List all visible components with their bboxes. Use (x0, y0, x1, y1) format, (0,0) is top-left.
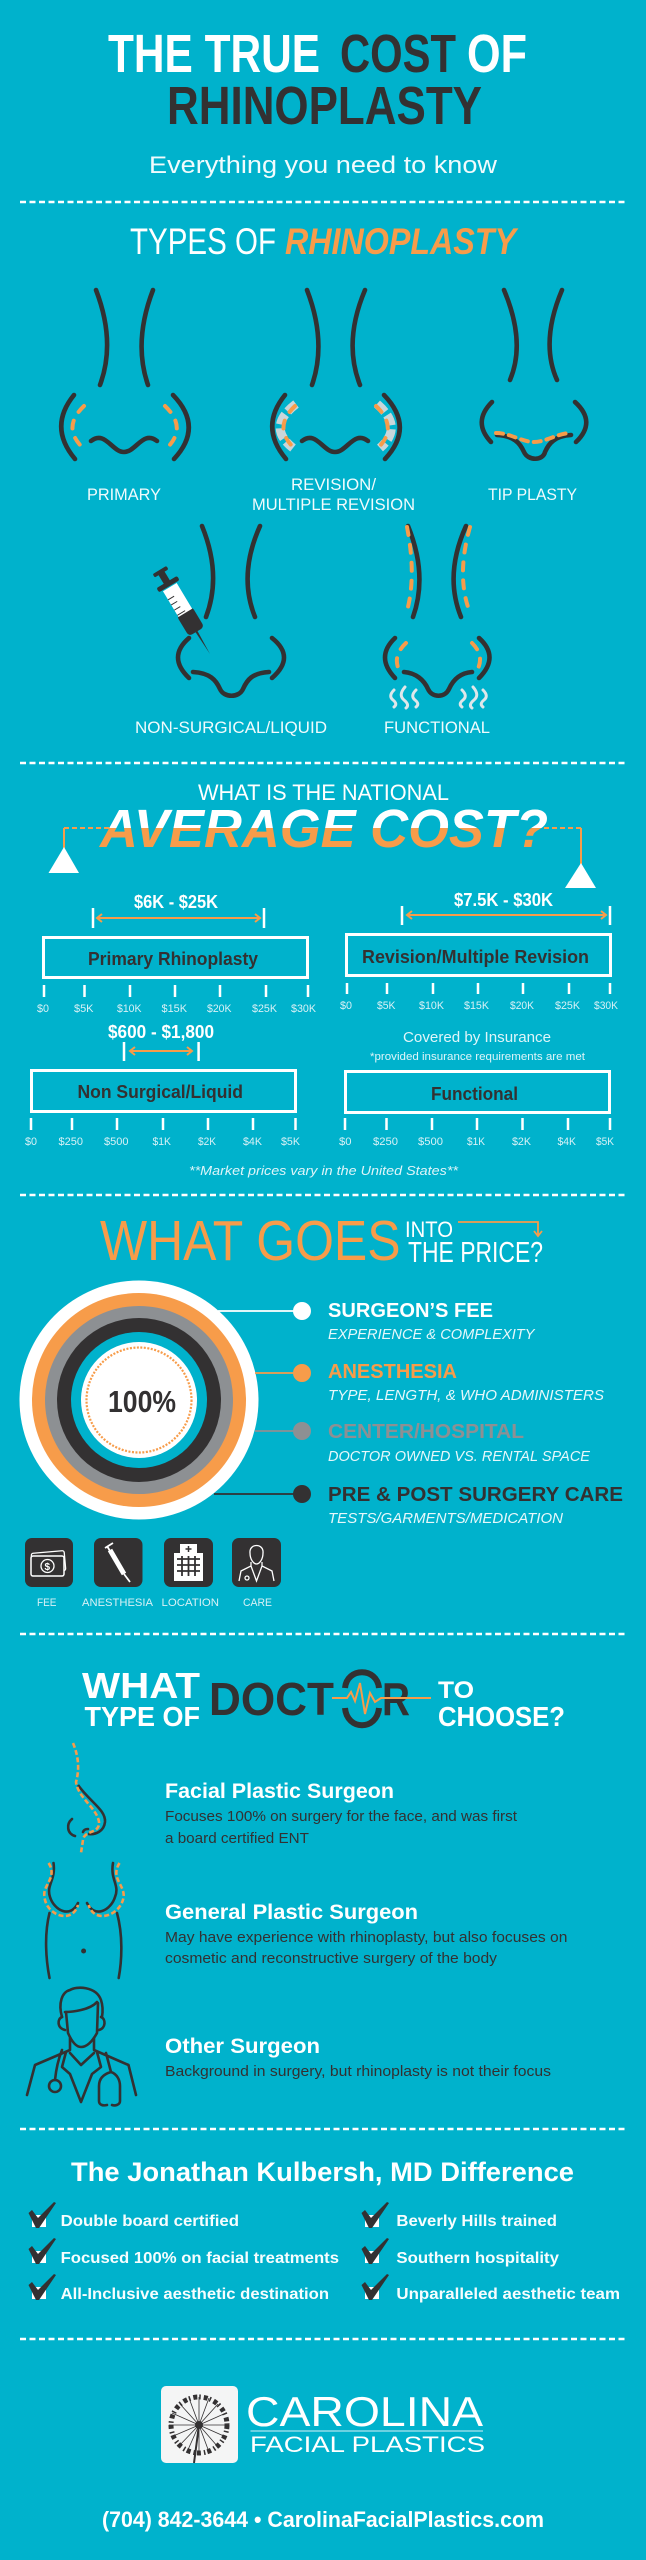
icon: revision nose (272, 290, 400, 459)
callout: center/hospital: CENTER/HOSPITAL (328, 1421, 524, 1443)
heading: national average cost: WHAT IS THE NATIONAL (198, 780, 449, 805)
icon labels: LOCATION (162, 1597, 219, 1609)
axis: $0 to $5K: $4K (243, 1136, 263, 1148)
label: tip plasty: TIP PLASTY (488, 485, 577, 504)
title (108, 24, 527, 136)
axis: $0 to $5K: $5K (596, 1136, 615, 1148)
heading: national average cost: AVERAGE COST? (98, 799, 548, 859)
price range: $7.5K - $30K: $7.5K - $30K (454, 890, 553, 910)
panel: header (108, 24, 527, 179)
axis: $0 to $5K: $500 (104, 1136, 128, 1148)
title: OF (467, 24, 527, 84)
box: functional (346, 1072, 610, 1112)
axis: $0 to $5K: $2K (198, 1136, 217, 1148)
callout: pre and post surgery care: TESTS/GARMENTS/MEDICATION (328, 1511, 564, 1527)
panel: kulbersh difference (28, 2157, 620, 2303)
icon labels: ANESTHESIA (82, 1597, 154, 1609)
box: revision/multiple revision (346, 934, 610, 976)
text: facial plastic surgeon: Facial Plastic Surgeon (165, 1779, 394, 1803)
box: non surgical/liquid: Non Surgical/Liquid (78, 1082, 243, 1102)
callout: center/hospital (255, 1421, 590, 1465)
callout: anesthesia: TYPE, LENGTH, & WHO ADMINISTERS (328, 1388, 604, 1404)
heading: kulbersh difference: The Jonathan Kulbersh, MD Difference (71, 2157, 574, 2187)
callout: center/hospital: DOCTOR OWNED VS. RENTAL SPACE (328, 1449, 590, 1465)
box: revision/multiple revision: Revision/Multiple Revision (362, 947, 589, 967)
list item: southern hospitality (362, 2238, 559, 2267)
icon: doctor outline (27, 1988, 136, 2105)
heading: types of rhinoplasty: RHINOPLASTY (285, 221, 519, 262)
box: non surgical/liquid (32, 1070, 296, 1112)
icon: nose profile (68, 1743, 105, 1853)
icon: primary nose (61, 290, 189, 459)
axis: $0 to $5K: $250 (373, 1136, 398, 1148)
icon: functional nose with airflow (385, 526, 490, 708)
heading: what type of doctor to choose: TO (438, 1677, 474, 1704)
axis: $0 to $30K: $15K (162, 1003, 188, 1015)
axis: $0 to $5K: $1K (152, 1136, 172, 1148)
price scale: revision (340, 890, 619, 1012)
contact line: (704) 842-3644 • CarolinaFacialPlastics.com (102, 2507, 544, 2532)
icon labels (37, 1597, 272, 1609)
price range: $600 - $1,800: $600 - $1,800 (108, 1022, 214, 1042)
axis: $0 to $30K: $0 (340, 1000, 352, 1012)
heading: what goes into the price: WHAT GOES (100, 1209, 400, 1273)
text: general plastic surgeon: cosmetic and reconstructive surgery of the body (165, 1950, 498, 1967)
axis: $0 to $5K: $1K (467, 1136, 486, 1148)
list item: unparalleled team (362, 2274, 620, 2303)
list item: beverly hills: Beverly Hills trained (396, 2213, 557, 2230)
panel: types of rhinoplasty (61, 221, 586, 737)
axis: $0 to $30K: $20K (207, 1003, 232, 1015)
label: functional: FUNCTIONAL (384, 718, 490, 737)
title: THE TRUE (108, 24, 320, 84)
list item: focused 100% (28, 2238, 339, 2267)
axis: $0 to $30K (37, 985, 317, 1015)
text: general plastic surgeon (165, 1900, 567, 1967)
label: revision: MULTIPLE REVISION (252, 495, 415, 514)
axis: $0 to $30K: $5K (74, 1003, 94, 1015)
insurance note (370, 1030, 585, 1063)
list item: southern hospitality: Southern hospitality (396, 2250, 559, 2267)
label: revision: REVISION/ (291, 475, 376, 494)
heading: what type of doctor to choose (82, 1665, 565, 1732)
heading: what goes into the price: INTO (405, 1217, 453, 1242)
logo wordmark (246, 2388, 485, 2457)
heading: what type of doctor to choose: CHOOSE? (438, 1701, 565, 1732)
axis: $0 to $30K: $5K (377, 1000, 396, 1012)
icon labels: FEE (37, 1597, 56, 1609)
axis: $0 to $5K: $250 (58, 1136, 83, 1148)
heading: what type of doctor to choose: DOCT (209, 1673, 334, 1725)
text: other surgeon: Background in surgery, but rhinoplasty is not their focus (165, 2063, 551, 2080)
footnote: **Market prices vary in the United States** (189, 1163, 459, 1178)
label: revision (252, 475, 415, 514)
insurance note: Covered by Insurance (403, 1030, 551, 1046)
axis: $0 to $5K: $0 (25, 1136, 37, 1148)
price range: $6K - $25K: $6K - $25K (134, 892, 218, 912)
subtitle: Everything you need to know (149, 152, 498, 179)
price range: $6K - $25K (93, 892, 264, 928)
icon: left pointer triangle (48, 828, 109, 873)
list item: beverly hills (362, 2202, 557, 2230)
text: general plastic surgeon: General Plastic Surgeon (165, 1900, 418, 1924)
price scale: primary rhinoplasty (37, 892, 317, 1015)
price scale: non surgical (25, 1022, 301, 1148)
axis: $0 to $5K (339, 1118, 615, 1148)
chart: concentric ring chart: 100% (108, 1384, 176, 1419)
callout: pre and post surgery care: PRE & POST SURGERY CARE (328, 1484, 623, 1506)
callout: surgeon's fee: EXPERIENCE & COMPLEXITY (328, 1327, 536, 1343)
panel: what goes into the price (20, 1209, 623, 1609)
axis: $0 to $30K: $10K (419, 1000, 445, 1012)
heading: what type of doctor to choose: WHAT (82, 1665, 200, 1706)
icon: care doctor (232, 1538, 281, 1587)
icon: syringe (149, 564, 220, 660)
axis: $0 to $30K: $25K (555, 1000, 581, 1012)
text: facial plastic surgeon: Focuses 100% on surgery for the face, and was first (165, 1808, 518, 1825)
logo wordmark: CAROLINA (246, 2388, 483, 2435)
heading: what type of doctor to choose: TYPE OF (84, 1701, 200, 1732)
axis: $0 to $30K (340, 983, 619, 1012)
axis: $0 to $30K: $20K (510, 1000, 535, 1012)
chart: concentric ring chart (20, 1280, 258, 1520)
icon: fee: $ (44, 1562, 50, 1573)
label: primary: PRIMARY (87, 485, 161, 504)
axis: $0 to $5K: $5K (281, 1136, 301, 1148)
axis: $0 to $30K: $30K (594, 1000, 619, 1012)
text: facial plastic surgeon (165, 1779, 518, 1847)
list item: all-inclusive: All-Inclusive aesthetic destination (61, 2286, 329, 2303)
callout: surgeon's fee (218, 1300, 536, 1343)
icon: fee (25, 1538, 73, 1587)
callout: anesthesia: ANESTHESIA (328, 1361, 457, 1383)
title: RHINOPLASTY (167, 76, 482, 136)
price range: $7.5K - $30K (402, 890, 610, 925)
box: primary rhinoplasty: Primary Rhinoplasty (88, 949, 258, 969)
panel: national average cost (25, 780, 619, 1178)
text: other surgeon (165, 2034, 551, 2080)
icon: location hospital (164, 1538, 213, 1587)
box: functional: Functional (431, 1084, 518, 1104)
axis: $0 to $5K: $4K (558, 1136, 577, 1148)
logo wordmark: FACIAL PLASTICS (250, 2432, 485, 2457)
icon: torso (44, 1863, 124, 1978)
icon labels: CARE (243, 1597, 272, 1609)
logo mark: dandelion (161, 2386, 238, 2463)
text: facial plastic surgeon: a board certified ENT (165, 1830, 309, 1847)
heading: what goes into the price: THE PRICE? (408, 1237, 543, 1269)
list item: all-inclusive (28, 2274, 329, 2303)
callout: pre and post surgery care (214, 1484, 623, 1527)
axis: $0 to $5K: $0 (339, 1136, 352, 1148)
price scale: functional (339, 1030, 615, 1148)
axis: $0 to $30K: $10K (117, 1003, 142, 1015)
heading: types of rhinoplasty: TYPES OF (130, 221, 276, 262)
list item: double board certified (28, 2202, 239, 2230)
list item: double board certified: Double board certified (61, 2213, 239, 2230)
axis: $0 to $30K: $0 (37, 1003, 49, 1015)
axis: $0 to $30K: $15K (464, 1000, 490, 1012)
callout: surgeon's fee: SURGEON’S FEE (328, 1300, 493, 1322)
heading: what type of doctor to choose: R (382, 1673, 410, 1725)
list item: focused 100%: Focused 100% on facial treatments (61, 2250, 339, 2267)
callout: anesthesia (255, 1361, 604, 1404)
icon: non-surgical nose with syringe (149, 526, 284, 696)
axis: $0 to $5K: $2K (512, 1136, 532, 1148)
list item: unparalleled team: Unparalleled aesthetic team (396, 2286, 620, 2303)
icon: anesthesia syringe (94, 1538, 142, 1587)
insurance note: *provided insurance requirements are met (370, 1051, 585, 1063)
icon: right pointer triangle (544, 828, 596, 888)
axis: $0 to $30K: $30K (291, 1003, 317, 1015)
panel: what type of doctor (27, 1665, 567, 2105)
panel: logo and contact (102, 2386, 544, 2532)
axis: $0 to $30K: $25K (252, 1003, 278, 1015)
axis: $0 to $5K (25, 1118, 301, 1148)
axis: $0 to $5K: $500 (418, 1136, 443, 1148)
icon: tip plasty nose (482, 290, 586, 459)
label: non-surgical: NON-SURGICAL/LIQUID (135, 718, 327, 737)
heading: types of rhinoplasty (130, 221, 519, 262)
price range: $600 - $1,800 (108, 1022, 214, 1061)
text: other surgeon: Other Surgeon (165, 2034, 320, 2058)
title: COST (340, 24, 456, 84)
text: general plastic surgeon: May have experience with rhinoplasty, but also focuses on (165, 1929, 567, 1946)
box: primary rhinoplasty (44, 938, 308, 978)
